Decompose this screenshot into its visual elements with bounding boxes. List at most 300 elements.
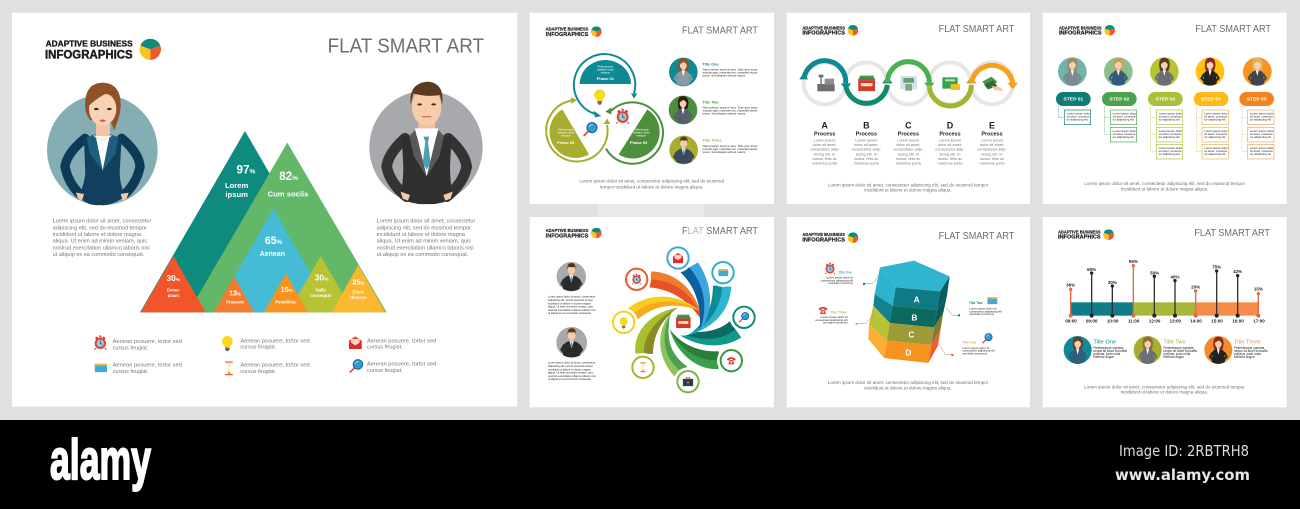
icon ring: envelope [664,244,692,272]
callout: title one: Title One [838,270,852,274]
timeline chart: 15% [1254,287,1263,292]
person: step 04 [1196,57,1224,86]
timeline chart: 14:00 [1190,318,1202,323]
logo [546,228,602,239]
legend [94,335,436,375]
triangle chart: 25% [352,278,364,287]
timeline chart [1065,259,1265,323]
process B: B [863,121,870,131]
callout: title four [939,333,995,356]
caption: incididunt ut labore et dolore magna aliqua. [864,386,952,392]
step 04 column: sit amet, consecte [1204,149,1228,153]
icon: cash register [817,75,835,91]
callout: title three [815,307,874,325]
logo: INFOGRAPHICS [1058,235,1101,241]
title: FLAT SMART ART [939,231,1014,242]
step 02 column: sit amet, consecte [1113,115,1136,119]
process C: maximus porta [896,162,922,166]
step 01 column: STEP 01 [1063,97,1083,103]
alamy logo: alamy [50,428,151,492]
text block: left [53,219,152,258]
process A: maximus porta [812,162,838,166]
legend: Aenean posuere, tortor sed [367,362,436,368]
process A: luctus, felis ac [813,157,837,161]
step 04 column: tur adipiscing elit [1204,118,1226,122]
person: title one [1064,336,1092,364]
triangle chart [140,131,387,312]
timeline chart: 20% [1191,285,1200,290]
text: title two: Title Two [1163,340,1186,346]
logo [546,26,602,38]
text: title one: Title One [702,62,719,66]
triangle chart: 30% [315,273,329,283]
step 05 column: STEP 05 [1247,97,1267,103]
logo: ADAPTIVE BUSINESS [802,25,845,30]
step 02 column: tur adipiscing elit [1113,135,1134,139]
person: title two [1134,336,1162,364]
text: title three: eleifend augue [1234,355,1255,359]
text block: right: ut aliquip ex ea commodo consequat. [377,252,468,258]
prism chart [868,261,950,363]
process chain [799,61,1018,106]
step 04 column [1194,92,1228,159]
process D: iscing elit. In [939,152,961,156]
timeline chart: 13:00 [1170,318,1182,323]
timeline chart: 12:00 [1149,318,1161,323]
timeline chart: 17:00 [1253,318,1265,323]
text: title three: neque sit amet convallis [1234,349,1268,353]
callout: title one: consectetur adipiscing elit [821,278,853,282]
step 04 column: Lorem ipsum dolor [1204,112,1228,116]
person: step 03 [1150,57,1179,86]
logo: ADAPTIVE BUSINESS [802,232,845,237]
logo [802,25,858,37]
caption: Lorem ipsum dolor sit amet, consectetur adipiscing elit, sed do eiusmod tempor [1084,384,1245,390]
caption: incididunt ut labore et dolore magna aliqua. [864,188,952,194]
text: bottom person: incididunt ut labore et dolore magna [548,367,591,371]
arrow: C [887,62,935,89]
logo: ADAPTIVE BUSINESS [546,27,589,32]
text: bottom person: aliqua. Ut enim ad minim veniam, quis [548,371,593,375]
icon: bulb [222,336,233,351]
step 04 column: Lorem ipsum dolor [1204,129,1228,133]
triangle chart: Nulla [316,288,326,293]
title: FLAT SMART ART [939,24,1014,35]
caption: Lorem ipsum dolor sit amet, consectetur adipiscing elit, sed do eiusmod tempor [828,380,989,386]
icon ring: calendar [709,258,737,287]
icon: bulb [594,89,605,105]
text: title one: suscipit eget, imperdiet nec, imperdiet iaculis, [703,71,758,75]
step 02 column: tur adipiscing elit [1113,118,1134,122]
logo [1058,229,1114,241]
text: title one [1093,340,1127,359]
legend: cursus feugiat. [113,345,149,351]
person: bottom [556,327,587,358]
process E: iscing elit. In [981,152,1003,156]
phase 03: habitant morbi [557,131,574,135]
text: top person: adipiscing elit, sed do eiusmod tempor [548,298,593,302]
text: title three: Title Three [1234,340,1261,346]
center icon [669,308,697,336]
person: title three [1204,336,1232,364]
text: bottom person: Lorem ipsum dolor sit amet, consectetur [548,361,595,365]
step 03 column: Lorem ipsum dolor [1159,129,1182,133]
logo [45,39,161,62]
step 05 column: tur adipiscing elit [1250,152,1271,156]
arrow: E [971,65,1018,89]
step 03 column: tur adipiscing elit [1159,152,1180,156]
icon ring: briefcase [674,367,702,396]
person: title two [669,96,697,124]
text: title two: Nam pretium turpis et arcu. Duis arcu tortor, [703,106,758,110]
callout: title two [946,297,1002,316]
step 03 column: sit amet, consecte [1159,149,1182,153]
process D: consectetur adip- [935,148,965,152]
step 02 column: sit amet, consecte [1113,132,1136,136]
petal: blue [681,262,710,331]
process E: E [989,121,995,131]
text: title two: eleifend augue [1163,355,1184,359]
triangle chart: Cum sociis [268,190,308,199]
step 02 column [1102,92,1137,142]
icon: magnifier [350,360,363,372]
text block: left: nostrud exercitation ullamco laboris nisi [53,245,150,251]
text: title two [1163,340,1197,359]
legend: cursus feugiat. [240,345,276,351]
spiral chart [609,244,758,396]
text: title three [1234,340,1268,359]
legend: Aenean posuere, tortor sed [113,363,182,369]
caption: Lorem ipsum dolor sit amet, consectetur adipiscing elit, sed do eiusmod [579,179,724,185]
phase 02: Phase 02 [630,140,648,145]
triangle chart: 13% [229,288,241,297]
step 04 column: tur adipiscing elit [1204,135,1226,139]
icon ring: magnifier [730,303,758,332]
triangle chart: rhoncus [350,295,367,300]
panel: triangle chart slide [12,13,517,407]
text: title three: pulvinar, justo nulla [1234,352,1261,356]
logo [1059,25,1115,37]
petal: yellow [628,297,700,319]
text: title two: ipsum. Sed aliquam ultrices mauris. [703,112,746,116]
process E [977,121,1007,166]
timeline chart: 30% [1108,280,1117,285]
person: top [557,262,586,291]
triangle chart: 30% [166,273,181,283]
triangle chart: consequat [310,293,332,298]
triangle chart: quam [168,293,179,298]
text: title one: ipsum. Sed aliquam ultrices mauris. [703,74,746,78]
triangle chart: 15% [281,285,293,294]
portrait: businessman [369,82,483,204]
timeline chart: 10:00 [1107,318,1119,323]
triangle chart: Aenean [260,251,285,258]
petal: olive [635,307,678,354]
person: step 01 [1058,57,1087,86]
text block: right: adipiscing elit, sed do eiusmod tempor [377,225,471,231]
process B: dolor sit amet, [854,143,878,147]
process E: Process [981,132,1003,138]
phase 03: tristique [561,134,571,138]
process B: Lorem ipsum [855,139,877,143]
callout: title four: sed diam nonummy [962,352,988,356]
arrow: green ring [605,102,663,164]
panel: prism slide [787,217,1030,407]
callout: title two: Lorem ipsum dolor sit [969,307,997,311]
text block: left: ut aliquip ex ea commodo consequat. [53,252,144,258]
icon: stopwatch [94,335,106,350]
icon: bills and card [942,77,960,90]
petal: cyan [688,286,731,336]
step 02 column: STEP 02 [1109,97,1129,103]
process C [894,121,924,166]
timeline chart: 55% [1129,259,1138,264]
timeline chart: 15:00 [1211,318,1223,323]
text block: left: Lorem ipsum dolor sit amet, consectetur [53,219,152,225]
process B: luctus, felis ac [854,157,878,161]
arrow: teal ring [574,54,637,117]
text: top person: incididunt ut labore et dolore magna [548,301,591,305]
step 05 column: Lorem ipsum dolor [1250,129,1273,133]
panel: spiral slide [530,217,774,407]
petal: green [670,329,719,369]
icon: atm [900,76,917,91]
text: title one: eleifend augue [1093,355,1114,359]
step 01 column [1056,92,1091,125]
step 03 column [1148,92,1183,159]
callout: title two: sed diam nonummy [969,312,995,316]
callout: title four: Title Four [962,340,977,344]
panel: steps slide [1043,13,1287,204]
phase 03: Phase 03 [557,140,575,145]
logo: INFOGRAPHICS [45,48,133,62]
step 05 column: Lorem ipsum dolor [1250,146,1273,150]
caption: Lorem ipsum dolor sit amet, consectetur adipiscing elit, sed do eiusmod tempor [1084,181,1245,187]
text: title one: Title One [1093,340,1116,346]
process E: dolor sit amet, [980,143,1004,147]
step 05 column: Lorem ipsum dolor [1250,112,1273,116]
process C: luctus, felis ac [896,157,920,161]
triangle chart: Praesent [226,300,244,305]
icon ring: hourglass [629,353,657,382]
step 01 column: tur adipiscing elit [1067,118,1088,122]
icon: card [95,364,107,372]
process E: Lorem ipsum [981,139,1003,143]
title: FLAT SMART ART [328,35,484,57]
cycle diagram [546,54,663,164]
process D: Process [939,132,961,138]
phase 01 [580,60,631,84]
process C: consectetur adip- [894,148,924,152]
legend: Aenean posuere, tortor sed [240,338,310,344]
triangle chart: Lorem [225,181,249,190]
logo: ADAPTIVE BUSINESS [546,228,589,233]
triangle chart: 82% [279,170,298,183]
process E: luctus, felis ac [980,157,1004,161]
legend: Aenean posuere, tortor sed [113,339,182,345]
icon: hourglass [225,361,233,375]
panel: process chain slide [787,13,1030,204]
arrow: olive ring [546,97,610,161]
text: title three: suscipit eget, imperdiet nec, imperdiet iaculis, [703,147,758,151]
petal: teal [670,321,741,345]
callout: title three: sed diam nonummy [823,321,848,325]
process D [935,121,965,166]
title: FLAT SMART ART [1195,24,1271,35]
panel: phase cycle slide [530,13,774,204]
text: title two: Pellentesque egestas, [1163,346,1195,350]
layer D: D [905,347,911,357]
icon: envelope [349,336,362,349]
caption: incididunt ut labore et dolore magna aliqua. [1121,390,1208,396]
step 05 column: tur adipiscing elit [1250,118,1271,122]
text: top person: aliqua. Ut enim ad minim veniam, quis [548,305,593,309]
callout: title three: Title Three [831,310,847,314]
text: title one: Nam pretium turpis et arcu. Duis arcu tortor, [703,68,758,72]
process D: dolor sit amet, [938,143,962,147]
person: step 02 [1104,57,1133,86]
phase 01: tristique [601,71,610,75]
timeline chart: 60% [1087,267,1096,272]
text: title two [702,100,758,116]
person: title three [669,136,698,164]
logo: ADAPTIVE BUSINESS [46,39,133,49]
process C: dolor sit amet, [896,143,920,147]
title: FLAT SMART ART [1194,228,1270,239]
process C: C [905,121,912,131]
step 04 column: sit amet, consecte [1204,132,1228,136]
arrow: B [846,77,893,103]
phase 01: habitant morbi [597,68,614,72]
callout: title three: Lorem ipsum dolor sit [821,315,848,319]
timeline chart: 09:00 [1086,318,1098,323]
text: bottom person: nostrud exercitation ullamco laboris nisi [548,374,596,378]
text block: right: incididunt ut labore et dolore magna [377,232,465,238]
process D: luctus, felis ac [938,157,962,161]
callout: title one: Lorem ipsum dolor sit [826,275,853,279]
layer C: C [908,329,914,339]
step 04 column: STEP 04 [1201,97,1221,103]
legend: Aenean posuere, tortor sed [367,338,436,344]
text: top person: ut aliquip ex ea commodo consequat. [548,311,591,315]
step 03 column: Lorem ipsum dolor [1159,112,1182,116]
triangle chart: ipsum [225,190,248,199]
process C: Process [898,132,919,138]
icon: shop [858,76,876,91]
text: title one: pulvinar, justo nulla [1093,352,1120,356]
timeline chart: 11:00 [1128,318,1140,323]
logo: INFOGRAPHICS [802,237,845,243]
step 04 column: Lorem ipsum dolor [1204,146,1228,150]
text block: left: incididunt ut labore et dolore magna [53,232,141,238]
text block: right: Lorem ipsum dolor sit amet, consectetur [377,219,476,225]
callout: title two: Title Two [969,301,982,305]
callout: title four: consectetur adipiscing elit [962,349,995,353]
process E: consectetur adip- [977,148,1007,152]
logo: INFOGRAPHICS [1059,31,1102,37]
phase 02 [619,109,660,159]
triangle chart: 65% [265,235,283,247]
text: title one: neque sit amet convallis [1093,349,1127,353]
text block: right: nostrud exercitation ullamco laboris nisi [377,245,474,251]
legend: Aenean posuere, tortor sed [240,363,310,369]
portrait: businesswoman [47,83,158,205]
step 05 column: sit amet, consecte [1250,149,1273,153]
panel: timeline slide [1043,217,1287,407]
text: title two: Title Two [702,100,719,104]
step 03 column: STEP 03 [1155,97,1175,103]
icon: stopwatch [616,109,629,124]
text: title two: neque sit amet convallis [1163,349,1197,353]
text: bottom person: ut aliquip ex ea commodo consequat. [548,377,591,381]
text: title three: Pellentesque egestas, [1234,346,1265,350]
text: title one: Pellentesque egestas, [1093,346,1125,350]
process C: Lorem ipsum [897,139,919,143]
logo: ADAPTIVE BUSINESS [1058,229,1101,234]
text: bottom person: adipiscing elit, sed do eiusmod tempor [548,364,593,368]
text: title three: ipsum. Sed aliquam ultrices mauris. [703,150,746,154]
person: step 05 [1243,57,1272,86]
step 02 column: Lorem ipsum dolor [1113,112,1136,116]
text: top person: nostrud exercitation ullamco laboris nisi [548,308,596,312]
legend: cursus feugiat. [367,368,403,374]
text block: left: adipiscing elit, sed do eiusmod tempor [53,225,147,231]
timeline chart: 75% [1212,264,1221,269]
logo: ADAPTIVE BUSINESS [1059,25,1102,30]
legend: cursus feugiat. [240,369,276,375]
step 01 column: sit amet, consecte [1067,115,1090,119]
text: title two: suscipit eget, imperdiet nec, imperdiet iaculis, [703,109,758,113]
phase 02: habitant morbi [633,131,650,135]
logo: INFOGRAPHICS [546,233,588,239]
step 03 column: Lorem ipsum dolor [1159,146,1182,150]
step 04 column: tur adipiscing elit [1204,152,1226,156]
callout: title four: Lorem ipsum dolor sit [962,346,990,350]
triangle chart: 97% [237,163,256,176]
caption: tempor incididunt ut labore et dolore magna aliqua. [600,184,703,190]
text: top person: Lorem ipsum dolor sit amet, consectetur [548,295,595,299]
process A: consectetur adip- [810,148,840,152]
process B: Process [856,132,877,138]
step 01 column: Lorem ipsum dolor [1067,112,1090,116]
timeline chart: 16:00 [1232,318,1244,323]
arrow: D [929,77,977,106]
logo [802,232,858,243]
phase 03: Pellentesque [558,128,574,132]
icon ring: phone [717,346,746,375]
caption: incididunt ut labore et dolore magna aliqua. [1121,186,1208,192]
timeline chart: 40% [1171,274,1179,279]
title: FLAT SMART ART [682,226,758,237]
petal: light green [660,312,687,376]
person: title one [669,58,698,86]
process D: maximus porta [937,162,963,166]
phase 01: Phase 01 [597,76,615,81]
callout: title three: consectetur adipiscing elit [815,318,848,322]
process A: iscing elit. In [814,152,835,156]
callout: title one [821,263,880,285]
process B [852,121,882,166]
text: title three [702,138,758,154]
text: title one [702,62,758,78]
phase 01: Pellentesque [598,65,614,69]
phase 02: Pellentesque [634,128,650,132]
process D: D [947,121,954,131]
text block: right: aliqua. Ut enim ad minim veniam, quis [377,239,471,245]
logo: INFOGRAPHICS [546,32,588,38]
process A: Lorem ipsum [814,139,836,143]
step 04 column: sit amet, consecte [1204,115,1228,119]
